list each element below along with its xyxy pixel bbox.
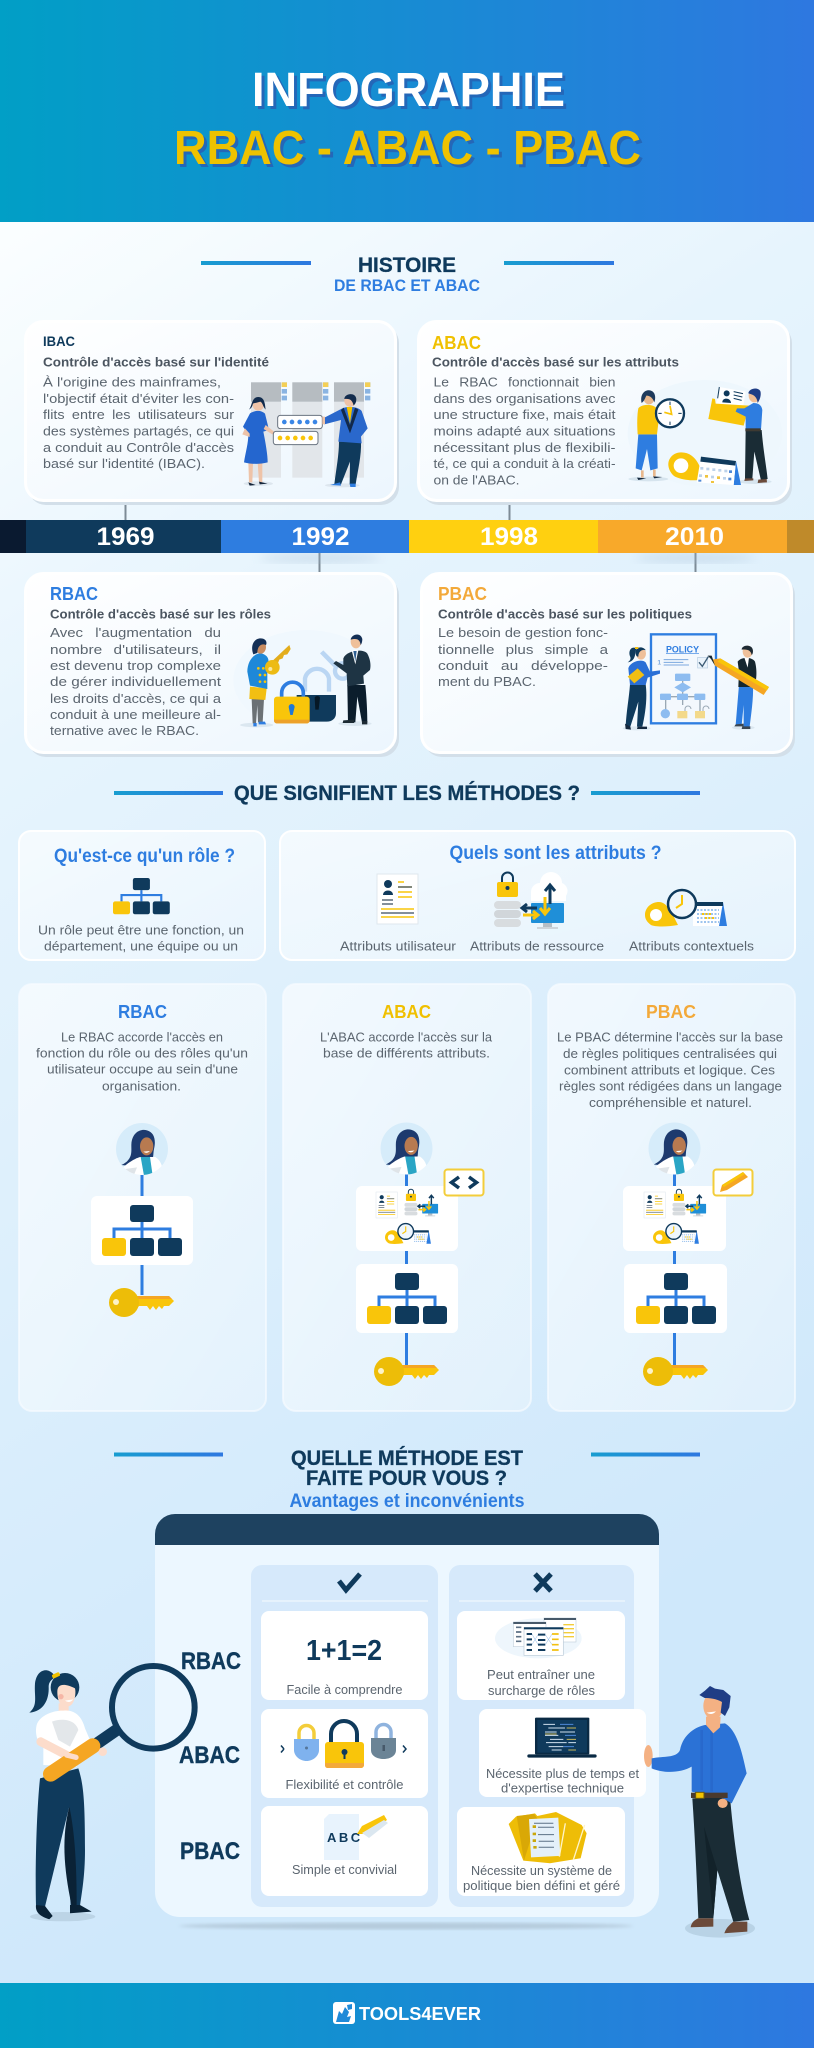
year 2010: 2010 xyxy=(665,523,724,551)
attribute labels: Attributs utilisateur xyxy=(340,938,457,954)
panel: ABAC xyxy=(418,322,792,505)
caption: surcharge de rôles xyxy=(488,1683,595,1698)
IBAC body text: basé sur l'identité (IBAC). xyxy=(43,456,205,471)
RBAC method title: RBAC xyxy=(118,1002,167,1022)
RBAC method text: fonction du rôle ou des rôles qu'un xyxy=(36,1046,248,1060)
PBAC flow diagram xyxy=(623,1123,752,1386)
icon: laptop xyxy=(527,1718,597,1758)
heading: que signifient les methodes xyxy=(114,782,700,805)
illustration: man in blue shirt xyxy=(644,1686,755,1938)
caption: politique bien défini et géré xyxy=(463,1878,620,1893)
icon: key xyxy=(374,1357,439,1386)
icon: org chart xyxy=(113,878,170,914)
cell: time and expertise xyxy=(479,1709,646,1797)
row label PBAC: PBAC xyxy=(180,1838,240,1865)
IBAC body text: flits entre les utilisateurs sur xyxy=(43,407,235,422)
PBAC body text: tionnelle plus simple a xyxy=(438,642,609,657)
PBAC method text: compréhensible et naturel. xyxy=(589,1095,752,1110)
ABAC method text: L'ABAC accorde l'accès sur la xyxy=(320,1030,493,1044)
panel: attributes xyxy=(280,831,795,960)
PBAC method text xyxy=(557,1030,783,1110)
title line one: INFOGRAPHIE xyxy=(252,64,565,117)
RBAC body text: est devenu trop complexe xyxy=(50,658,221,673)
role box xyxy=(356,1264,458,1333)
ABAC body text: moins adapté aux situations xyxy=(434,424,616,438)
year 1969: 1969 xyxy=(96,523,154,551)
RBAC body text: de gérer individuellement xyxy=(50,674,221,689)
title line two: RBAC - ABAC - PBAC xyxy=(174,122,641,175)
RBAC body text: Avec l'augmentation du xyxy=(50,625,221,640)
role text: Un rôle peut être une fonction, un xyxy=(38,922,244,938)
IBAC body text xyxy=(43,374,235,471)
RBAC body text: nombre d'utilisateurs, il xyxy=(50,642,221,657)
attributes box xyxy=(356,1186,458,1251)
PBAC body text xyxy=(438,625,609,689)
role heading: Qu'est-ce qu'un rôle ? xyxy=(54,846,235,867)
illustration: clock, folder, pin and calendar xyxy=(628,380,782,487)
icon: resource attributes xyxy=(494,872,568,929)
panel: PBAC history xyxy=(422,574,795,757)
row label ABAC: ABAC xyxy=(179,1742,240,1769)
PBAC method text: combinent attributs et logique. Ces xyxy=(564,1062,776,1078)
attribute labels: Attributs de ressource xyxy=(470,938,604,954)
panel: PBAC method xyxy=(548,984,795,1411)
attributes heading: Quels sont les attributs ? xyxy=(450,843,662,864)
RBAC title: RBAC xyxy=(50,584,98,604)
icon: user avatar xyxy=(116,1123,168,1176)
RBAC method text: utilisateur occupe au sein d'une xyxy=(47,1062,238,1076)
icon: check mark xyxy=(339,1574,360,1590)
panel: ABAC method xyxy=(283,984,531,1411)
panel: comparison table xyxy=(155,1514,659,1917)
caption: Nécessite un système de xyxy=(471,1863,612,1878)
RBAC body text: ternative avec le RBAC. xyxy=(50,723,199,738)
row label RBAC: RBAC xyxy=(181,1648,241,1675)
icon: user avatar xyxy=(381,1123,432,1175)
cons column xyxy=(449,1565,634,1907)
RBAC body text: conduit à une meilleure al- xyxy=(50,707,221,722)
caption xyxy=(486,1766,639,1796)
RBAC subtitle: Contrôle d'accès basé sur les rôles xyxy=(50,606,271,622)
logo mark xyxy=(333,2002,355,2024)
illustration: policy document: POLICY xyxy=(666,644,699,654)
title line two: RBAC - ABAC - PBAC xyxy=(177,125,644,178)
ABAC method text xyxy=(320,1030,493,1060)
PBAC subtitle: Contrôle d'accès basé sur les politiques xyxy=(438,606,692,622)
illustration: server room and two people xyxy=(242,382,368,487)
PBAC body text: ment du PBAC. xyxy=(438,674,536,689)
PBAC body text: conduit au développe- xyxy=(438,658,608,673)
table shadow xyxy=(179,1922,633,1930)
ABAC body text: une structure fixe, mais était xyxy=(434,407,616,422)
illustration: policy document: 1 xyxy=(657,659,661,666)
IBAC body text: À l'origine des mainframes, xyxy=(43,374,221,390)
cell: simple and friendly xyxy=(261,1806,428,1896)
RBAC body text: les droits d'accès, ce qui a xyxy=(50,691,222,706)
caption: Flexibilité et contrôle xyxy=(286,1777,404,1792)
icon: ABC document and pencil: ABC xyxy=(327,1830,363,1845)
caption: Nécessite plus de temps et xyxy=(486,1766,639,1781)
PBAC body text: Le besoin de gestion fonc- xyxy=(438,625,608,640)
badge: code xyxy=(444,1170,484,1196)
sub heading: Avantages et inconvénients xyxy=(290,1491,524,1512)
icon: cross mark xyxy=(535,1574,551,1591)
icon: overlapping windows xyxy=(495,1618,582,1658)
timeline bar xyxy=(0,520,814,563)
header banner xyxy=(0,0,814,222)
panel: IBAC xyxy=(26,322,399,505)
heading text: QUELLE MÉTHODE EST xyxy=(291,1447,523,1470)
cell: defined policy system xyxy=(457,1807,625,1896)
heading text: HISTOIRE xyxy=(358,254,456,277)
timeline connectors xyxy=(126,498,696,574)
ABAC body text xyxy=(434,374,616,488)
caption: d'expertise technique xyxy=(501,1780,624,1796)
formula: 1+1=2 xyxy=(306,1635,382,1667)
icon: user avatar xyxy=(649,1123,700,1175)
ABAC body text: dans des organisations avec xyxy=(434,391,616,406)
panel: RBAC method xyxy=(19,984,266,1411)
ABAC body text: té, ce qui a conduit à la créati- xyxy=(434,456,616,471)
footer banner xyxy=(0,1983,814,2048)
role text: département, une équipe ou un xyxy=(44,938,238,954)
icon: user attributes document xyxy=(377,874,418,924)
icon: key xyxy=(109,1288,174,1317)
RBAC method text: Le RBAC accorde l'accès en xyxy=(61,1030,223,1044)
PBAC method text: règles sont rédigées dans un langage xyxy=(559,1078,782,1094)
IBAC body text: l'objectif était d'éviter les con- xyxy=(43,391,234,406)
ABAC subtitle: Contrôle d'accès basé sur les attributs xyxy=(432,354,679,370)
caption xyxy=(463,1863,620,1893)
icon: context attributes xyxy=(645,890,727,926)
role box xyxy=(91,1196,193,1265)
RBAC flow diagram xyxy=(91,1123,193,1317)
IBAC body text: a conduit au Contrôle d'accès xyxy=(43,440,235,455)
cell: easy to understand xyxy=(261,1611,428,1700)
attributes box xyxy=(623,1186,726,1251)
PBAC method text: de règles politiques centralisées qui xyxy=(563,1046,777,1061)
ABAC body text: on de l'ABAC. xyxy=(434,472,520,488)
heading: histoire xyxy=(201,254,614,295)
role box xyxy=(624,1264,727,1333)
icon: policy folders xyxy=(509,1812,587,1863)
caption: Facile à comprendre xyxy=(286,1682,402,1697)
logo wordmark: TOOLS4EVER xyxy=(359,2004,481,2024)
attribute labels xyxy=(340,938,755,954)
RBAC method text: organisation. xyxy=(102,1078,181,1094)
IBAC subtitle: Contrôle d'accès basé sur l'identité xyxy=(43,354,269,370)
heading text: QUE SIGNIFIENT LES MÉTHODES ? xyxy=(234,782,580,805)
cell: flexibility and control xyxy=(261,1709,428,1798)
heading: quelle methode: FAITE POUR VOUS ? xyxy=(306,1467,507,1490)
PBAC method text: Le PBAC détermine l'accès sur la base xyxy=(557,1030,783,1044)
illustration: policy document xyxy=(623,634,769,730)
IBAC title: IBAC xyxy=(43,333,75,349)
RBAC method text xyxy=(36,1030,248,1094)
ABAC flow diagram xyxy=(356,1123,484,1386)
year 1992: 1992 xyxy=(292,523,350,551)
panel: RBAC history xyxy=(26,574,399,757)
badge: pencil xyxy=(714,1170,752,1196)
role text xyxy=(38,922,244,954)
RBAC body text xyxy=(50,625,222,738)
ABAC method title: ABAC xyxy=(382,1002,431,1022)
attribute labels: Attributs contextuels xyxy=(629,938,755,954)
illustration: locks and keys xyxy=(233,630,380,730)
panel: role definition xyxy=(19,831,265,960)
ABAC method text: base de différents attributs. xyxy=(323,1046,490,1060)
heading: quelle methode xyxy=(114,1447,700,1512)
title line one: INFOGRAPHIE xyxy=(255,67,568,120)
year 1998: 1998 xyxy=(480,523,538,551)
illustration: woman with magnifying glass xyxy=(29,1666,195,1921)
ABAC body text: Le RBAC fonctionnait bien xyxy=(434,374,616,390)
PBAC title: PBAC xyxy=(438,584,487,604)
sub heading: DE RBAC ET ABAC xyxy=(334,276,480,295)
caption: Peut entraîner une xyxy=(487,1667,595,1682)
caption: Simple et convivial xyxy=(292,1862,397,1877)
ABAC body text: nécessitant plus de flexibili- xyxy=(434,440,616,455)
PBAC method title: PBAC xyxy=(646,1002,696,1022)
ABAC title: ABAC xyxy=(432,333,481,353)
IBAC body text: des systèmes partagés, ce qui xyxy=(43,424,234,438)
pros column xyxy=(251,1565,438,1907)
icon: key xyxy=(643,1357,708,1386)
icon: ABC document and pencil xyxy=(324,1814,388,1860)
icon: three padlocks xyxy=(281,1721,406,1768)
caption xyxy=(487,1667,595,1698)
cell: role overload xyxy=(457,1611,625,1700)
